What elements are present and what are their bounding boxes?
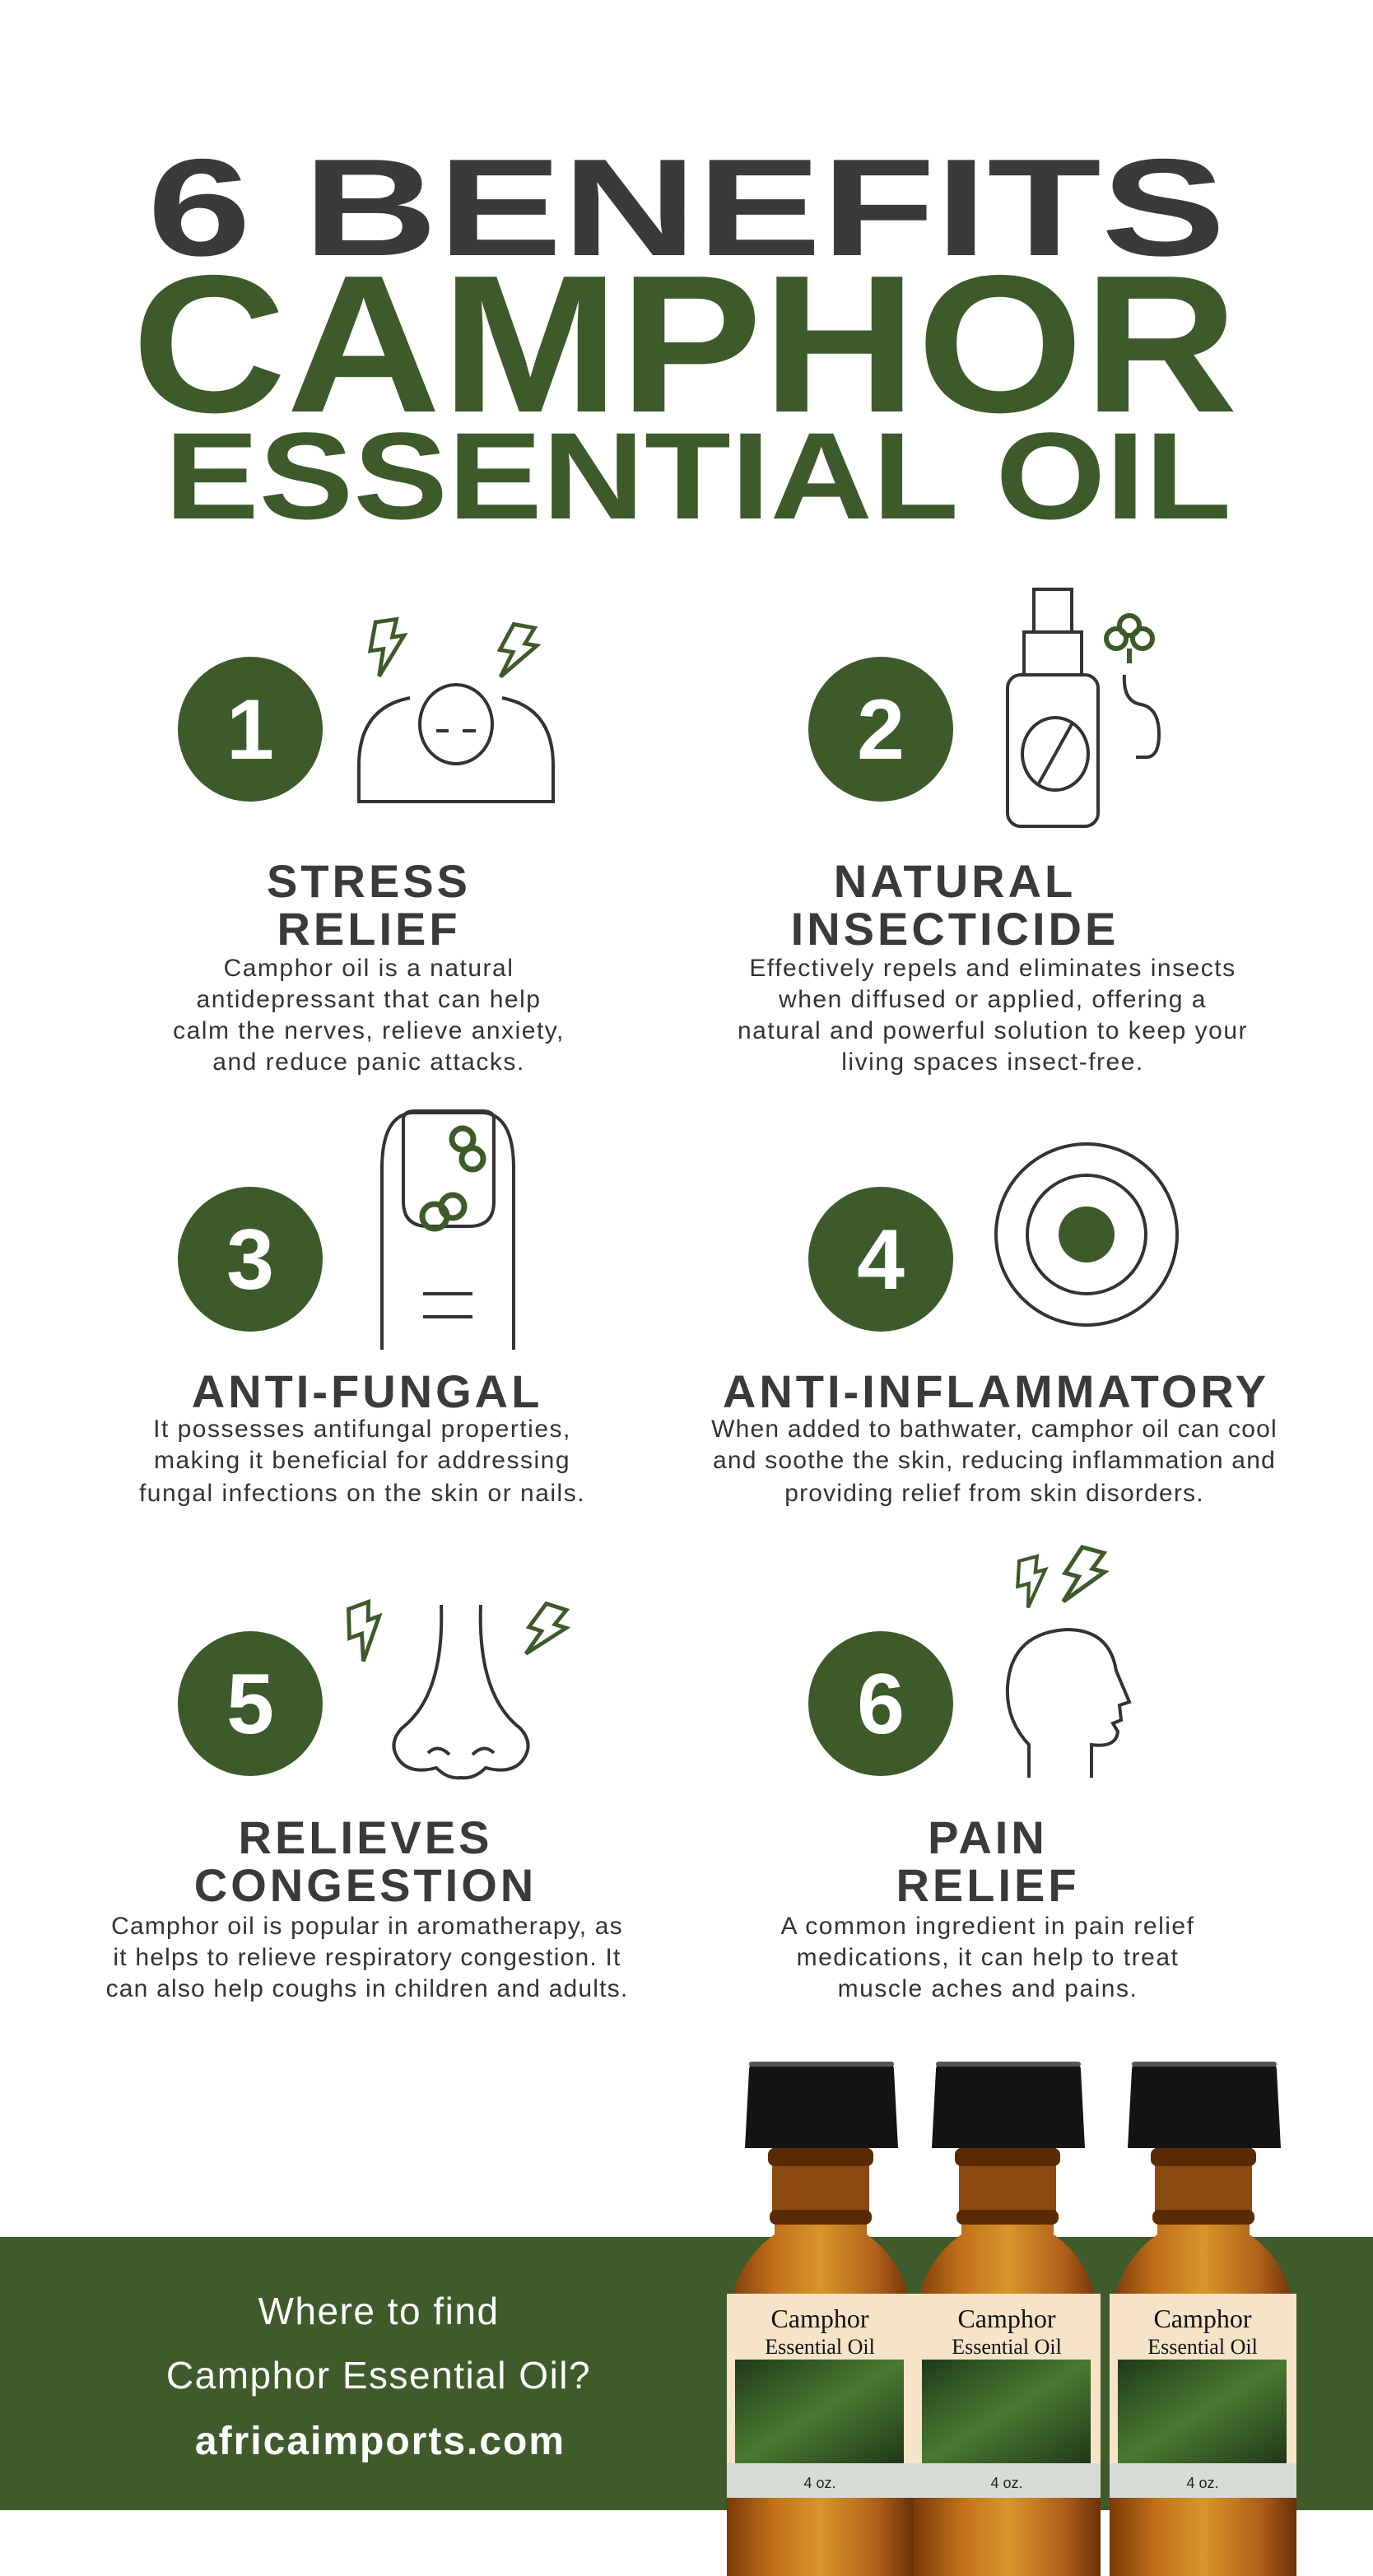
heading: PAIN [928, 1811, 1048, 1863]
heading: CONGESTION [194, 1859, 537, 1911]
number badge 2 [808, 657, 953, 802]
text block [781, 1913, 1194, 2002]
text block: muscle aches and pains. [838, 1975, 1138, 2002]
text block: and reduce panic attacks. [212, 1049, 525, 1076]
text block [106, 1913, 628, 2002]
text block: providing relief from skin disorders. [784, 1480, 1204, 1507]
heading [896, 1811, 1080, 1911]
text block: can also help coughs in children and adults. [106, 1975, 628, 2002]
text block: It possesses antifungal properties, [153, 1416, 571, 1443]
number badge 5 [178, 1631, 323, 1776]
title: 6 BENEFITS [147, 130, 1226, 285]
text block: when diffused or applied, offering a [778, 986, 1207, 1013]
heading: ANTI-INFLAMMATORY [723, 1365, 1269, 1417]
text block: natural and powerful solution to keep your [738, 1017, 1248, 1044]
panel: stress relief [173, 619, 565, 1076]
number badge 6 [808, 1631, 953, 1776]
heading [194, 1811, 537, 1911]
text block: Camphor oil is a natural [224, 955, 514, 982]
icon: finger nail [382, 1111, 514, 1350]
text block [711, 1416, 1278, 1507]
heading [791, 855, 1119, 955]
footer banner [0, 2237, 1373, 2510]
title [132, 130, 1238, 545]
product bottles [727, 2062, 1296, 2576]
panel: pain relief [781, 1545, 1194, 2002]
icon: head profile [1008, 1545, 1129, 1778]
text block: and soothe the skin, reducing inflammation and [713, 1447, 1276, 1474]
number badge 1 [178, 657, 323, 802]
text block: making it beneficial for addressing [154, 1447, 570, 1474]
call to action text: Where to find [258, 2290, 500, 2332]
title: CAMPHOR [132, 235, 1238, 453]
heading: RELIEVES [239, 1811, 492, 1863]
call to action text: Camphor Essential Oil? [166, 2354, 591, 2397]
icon: stressed person [359, 619, 553, 802]
number badge 5: 5 [226, 1657, 274, 1752]
call to action text: africaimports.com [195, 2420, 565, 2463]
text block: fungal infections on the skin or nails. [139, 1480, 585, 1507]
panel: natural insecticide [738, 589, 1248, 1076]
heading [267, 855, 471, 955]
number badge 3 [178, 1187, 323, 1332]
text block: A common ingredient in pain relief [781, 1913, 1194, 1940]
panel: anti-fungal [139, 1111, 585, 1507]
number badge 3: 3 [226, 1212, 274, 1308]
number badge 6: 6 [857, 1657, 905, 1752]
heading: RELIEF [896, 1859, 1080, 1911]
number badge 4: 4 [857, 1212, 905, 1308]
text block: When added to bathwater, camphor oil can cool [711, 1416, 1278, 1443]
number badge 4 [808, 1187, 953, 1332]
text block: antidepressant that can help [197, 986, 541, 1013]
heading: NATURAL [834, 855, 1076, 907]
heading: INSECTICIDE [791, 903, 1119, 955]
call to action text [166, 2290, 591, 2463]
heading: RELIEF [277, 903, 461, 955]
heading: ANTI-FUNGAL [192, 1365, 542, 1417]
text block [738, 955, 1248, 1076]
text block: Effectively repels and eliminates insects [749, 955, 1236, 982]
number badge 2: 2 [857, 682, 905, 778]
number badge 1: 1 [226, 682, 274, 778]
icon: nose [340, 1600, 571, 1778]
title: ESSENTIAL OIL [165, 407, 1231, 545]
text block: living spaces insect-free. [841, 1049, 1144, 1076]
text block: it helps to relieve respiratory congestion. It [113, 1944, 621, 1971]
icon: spray bottle [1008, 589, 1159, 826]
icon: target [996, 1144, 1177, 1325]
panel: anti-inflammatory [711, 1144, 1278, 1507]
text block [173, 955, 565, 1076]
text block [139, 1416, 585, 1507]
panel: relieves congestion [106, 1600, 628, 2002]
heading: STRESS [267, 855, 471, 907]
text block: medications, it can help to treat [797, 1944, 1179, 1971]
text block: Camphor oil is popular in aromatherapy, as [111, 1913, 623, 1940]
text block: calm the nerves, relieve anxiety, [173, 1017, 565, 1044]
